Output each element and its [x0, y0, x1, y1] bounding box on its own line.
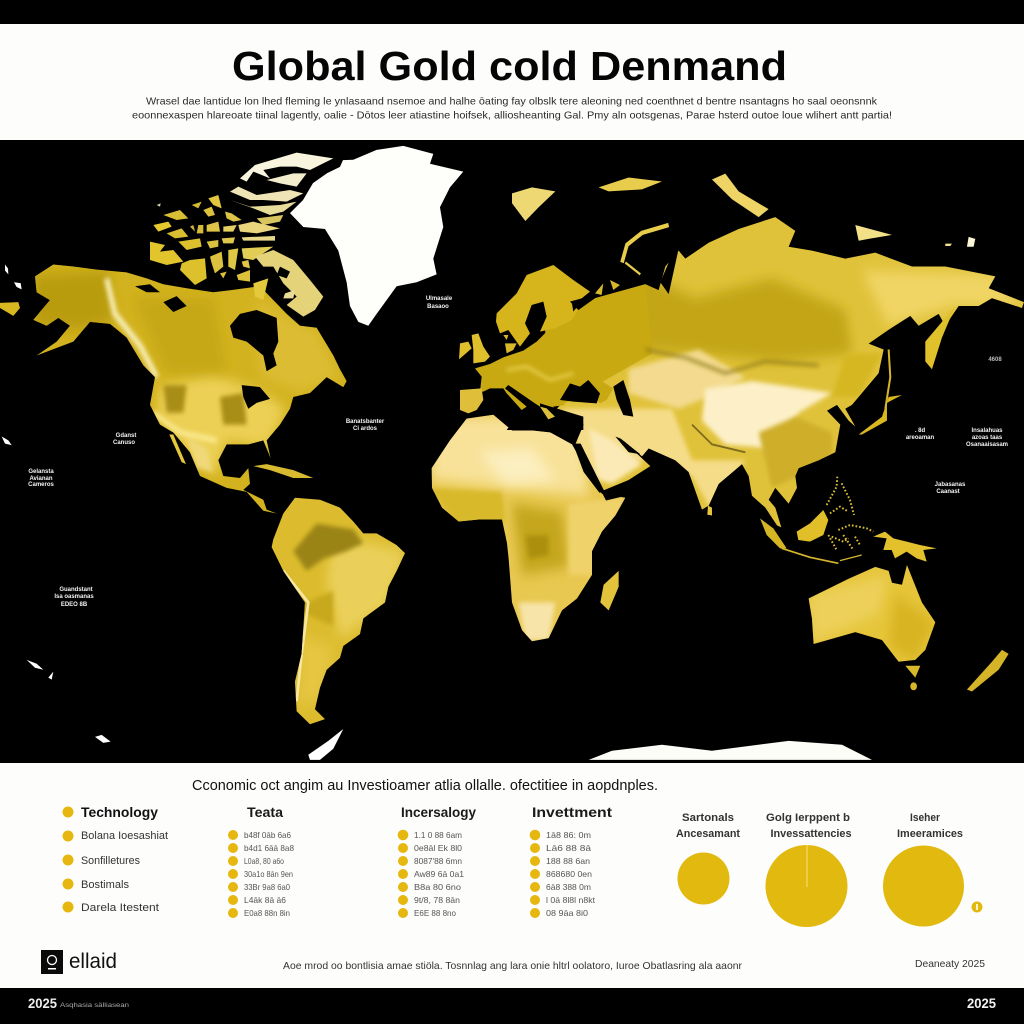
legend: Technology list: Bolana Ioesashiat: [81, 830, 168, 842]
label: Melanesia: [935, 482, 966, 495]
data column: Incersalogy: 0e8āl Ek 8l0: [414, 843, 462, 853]
land: South America: [272, 498, 405, 724]
data column: Incersalogy: 8087'88 6mn: [414, 856, 462, 866]
logo: [41, 950, 117, 974]
white Pacific islands: [2, 265, 343, 760]
land: Denmark and Baltic isles: [503, 280, 620, 353]
date label: Deaneaty 2025: [915, 958, 985, 970]
footer year right: 2025: [967, 996, 996, 1011]
land: Alaska islands: [0, 302, 20, 316]
legend: Technology list: [62, 804, 168, 914]
intro text: [132, 96, 892, 122]
data column: Invettment: 08 9āa 8i0: [546, 908, 588, 918]
circle chart: Golg Ierppent: Invessattencies: [770, 828, 852, 840]
label: south Pacific: [54, 587, 94, 608]
data column: Teata: 33Br 9a8 6a0: [244, 882, 290, 892]
land: Eurasia: [492, 217, 1024, 527]
logo: ellaid: [69, 950, 117, 973]
footer source note: Asqhasia sälliasean: [60, 1002, 129, 1009]
data column: Invettment: Invettment: [532, 804, 612, 820]
land: Italy and Greece highlights: [540, 407, 555, 419]
Caribbean islands: [253, 464, 313, 478]
label: south Pacific: Isa oasmanas: [54, 594, 94, 600]
data column: Teata: b4d1 6āā 8a8: [244, 843, 294, 853]
inland seas: [660, 249, 679, 294]
land: Australia: [809, 565, 935, 662]
footer bar: [0, 988, 1024, 1024]
data column: Invettment: 188 88 6an: [546, 856, 590, 866]
label: west Pacific: areoaman: [906, 435, 935, 441]
legend: Technology list: Darela Itestent: [81, 902, 159, 914]
land: Borneo: [797, 510, 828, 542]
water: Black Sea, Caspian, Baltic: [507, 302, 633, 430]
land: Red Sea and gulf overlays: [573, 436, 640, 501]
Philippine and Sulawesi speckles: [827, 477, 873, 550]
data column: Invettment: 868680 0en: [546, 869, 592, 879]
land: Sumatra: [760, 518, 787, 548]
land: Southeast Asia islands: [760, 477, 937, 563]
land: North America: [33, 265, 347, 514]
data column: Incersalogy: 9t/8, 78 8ān: [414, 895, 460, 905]
data column: Invettment: l 0ā 8l8l n8kt: [546, 895, 596, 905]
western hemisphere landmasses: [0, 146, 463, 760]
label: west Pacific: [906, 428, 935, 441]
panel: world map: [0, 140, 1024, 763]
label: south Pacific: Guandstant: [59, 587, 93, 593]
data column: Incersalogy: E6E 88 8no: [414, 908, 456, 918]
label: east Pacific: Canuso: [113, 440, 135, 446]
data column: Teata: 30a1o 8ān 9en: [244, 869, 293, 879]
label: far Pacific: azoas taas: [972, 435, 1003, 441]
legend: Technology list: Bostimals: [81, 879, 129, 891]
circle chart: Golg Ierppent: [766, 812, 852, 927]
title: Global Gold cold Denmand: [232, 43, 787, 89]
label: mid Pacific: Cameros: [28, 482, 54, 488]
circle chart: Iseher: Iseher: [910, 812, 941, 824]
legend: Technology list: Sonfilletures: [81, 855, 140, 867]
legend: Technology list: Technology: [81, 804, 158, 820]
header panel: [0, 24, 1024, 140]
land: Baja peninsula: [169, 434, 186, 464]
intro text: eoonnexaspen hlareoate tiinal lagently, oalie - Dōtos leer atiastine hoifsek, alliosheanting Gal. Pmy aln ootsgenas, Parae hsterd outoe loue wlihert antt partia!: [132, 110, 892, 122]
label: mid Pacific: [28, 469, 54, 488]
data column: Teata: b48f 0āb 6a6: [244, 830, 291, 840]
data column: Invettment: 1ā8 86: 0m: [546, 830, 591, 840]
label: Melanesia: Jabasanas: [935, 482, 966, 488]
label: Atlantic: Ci ardos: [353, 426, 378, 432]
Alps highlights: [507, 367, 573, 380]
data column: Teata: E0a8 88n 8in: [244, 908, 290, 918]
footer year left: 2025: [28, 996, 57, 1011]
data column: Invettment: [530, 804, 612, 918]
inland water: [135, 284, 278, 409]
land: Europe: [459, 265, 633, 430]
circle chart: Golg Ierppent: Golg Ierppent b: [766, 812, 850, 824]
data column: Incersalogy: Aw89 6ā 0a1: [414, 869, 464, 879]
land: Scandinavia: [496, 265, 590, 347]
label: mid Pacific: Avianan: [29, 476, 53, 482]
land: Java chain: [782, 548, 862, 563]
circle chart: Sartonals Ancesamant: Ancesamant: [676, 828, 740, 840]
map labels: [28, 296, 1008, 608]
land: Canadian Arctic archipelago: [150, 153, 333, 317]
label: Atlantic: [346, 419, 385, 432]
land: Antarctica: [589, 741, 872, 760]
circle chart: Sartonals Ancesamant: Sartonals: [682, 812, 734, 824]
label: mid Pacific: Gelansta: [28, 469, 54, 475]
label: east Pacific: [113, 433, 136, 446]
label: North Atlantic: Basaoo: [427, 304, 449, 310]
circle chart: Iseher: [883, 812, 964, 926]
land: New Guinea: [873, 532, 937, 562]
label: Melanesia: Caanast: [936, 489, 960, 495]
land: continental Europe: [475, 308, 613, 417]
label: west Pacific: . 8d: [915, 428, 925, 434]
land: Iberia: [460, 388, 483, 413]
panel: legend and data: [0, 763, 1024, 988]
circle chart: Sartonals Ancesamant: [676, 812, 740, 904]
label: far Pacific: [966, 428, 1008, 448]
icon: small gold marker: [972, 902, 982, 912]
data column: Incersalogy: 1.1 0 88 6am: [414, 830, 462, 840]
data column: Incersalogy: Incersalogy: [401, 804, 476, 820]
label: North Atlantic: Ulmasale: [426, 296, 453, 302]
footnote: Aoe mrod oo bontlisia amae stiöla. Tosnnlag ang lara onie hltrl oolatoro, Iuroe Obatlasring ala aaonr: [283, 960, 742, 972]
data column: Invettment: 6ā8 388 0m: [546, 882, 591, 892]
label: far Pacific: Osanaaisasam: [966, 442, 1008, 448]
label: Atlantic: Banatsbanter: [346, 419, 385, 425]
land: Africa: [429, 415, 625, 641]
land: Britain and Ireland: [459, 333, 490, 363]
label: south Pacific: EDEO 8B: [61, 602, 88, 608]
data column: Incersalogy: [398, 804, 476, 918]
data column: Teata: L4āk 8ā ā6: [244, 895, 286, 905]
eastern hemisphere landmasses: [429, 174, 1024, 760]
circle chart: Iseher: Imeeramices: [897, 828, 963, 840]
data column: Incersalogy: B8a 80 6no: [414, 882, 461, 892]
land: Greenland: [290, 146, 463, 326]
data column: Invettment: Lā6 88 8ā: [546, 843, 591, 853]
label: North Atlantic: [426, 296, 453, 310]
intro text: Wrasel dae lantidue lon lhed fleming le ynlasaand nsemoe and halhe ōating fay olbslk tere aleoning ned coenthnet d bentre nsantagns ho saal oeonsnnk: [146, 96, 878, 108]
data column: Teata: L0a8, 80 a6o: [244, 856, 284, 866]
data column: Teata: Teata: [247, 804, 283, 820]
label: North Pacific: 4608: [988, 357, 1002, 363]
label: east Pacific: Gdanst: [116, 433, 136, 439]
data column: Teata: [228, 804, 294, 918]
Arctic and Pacific islands: [512, 174, 1009, 691]
legend heading: Cconomic oct angim au Investioamer atlia ollalle. ofectitiee in aopdnples.: [192, 777, 658, 794]
label: far Pacific: Insalahuas: [971, 428, 1003, 434]
